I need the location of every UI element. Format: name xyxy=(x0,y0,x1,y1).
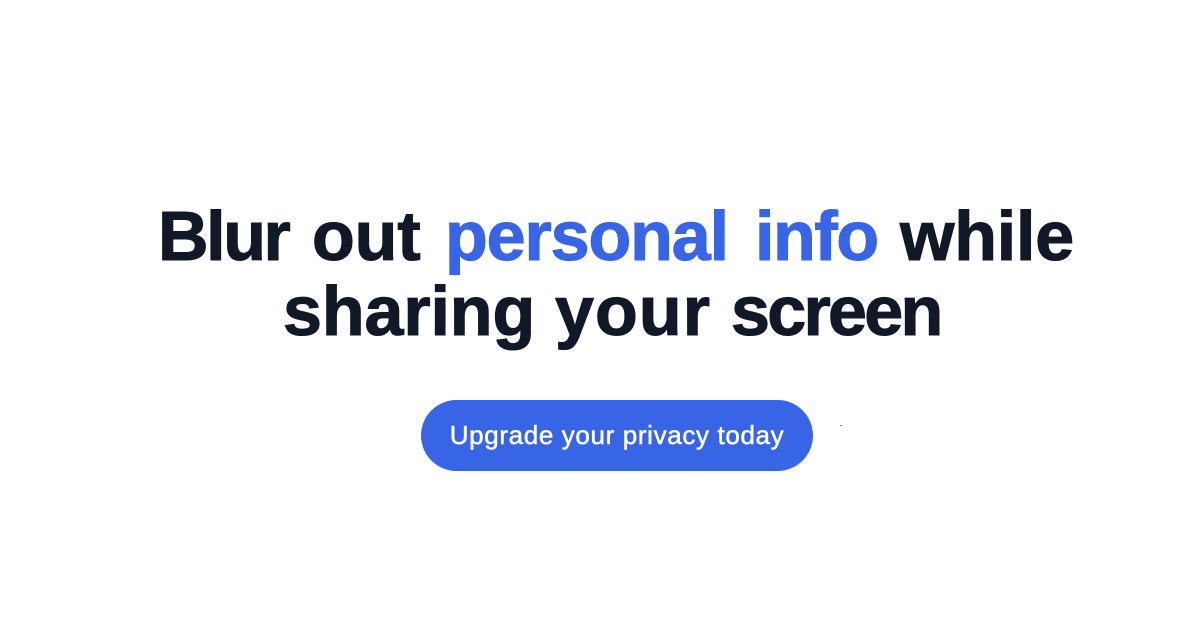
title line 1: Blur xyxy=(158,197,288,275)
title line 1: personal xyxy=(445,197,728,275)
title line 1: while xyxy=(900,197,1074,275)
title line 2 xyxy=(283,272,941,350)
title line 1 xyxy=(158,197,1074,275)
small speck xyxy=(840,425,842,426)
title line 1: out xyxy=(312,197,421,275)
call to action button: Upgrade your privacy today xyxy=(450,420,784,450)
title line 2: your xyxy=(555,272,711,350)
title line 2: sharing xyxy=(283,272,535,350)
title line 1: info xyxy=(755,197,878,275)
title line 2: screen xyxy=(731,272,941,350)
title xyxy=(158,197,1074,350)
call to action button xyxy=(421,400,813,471)
